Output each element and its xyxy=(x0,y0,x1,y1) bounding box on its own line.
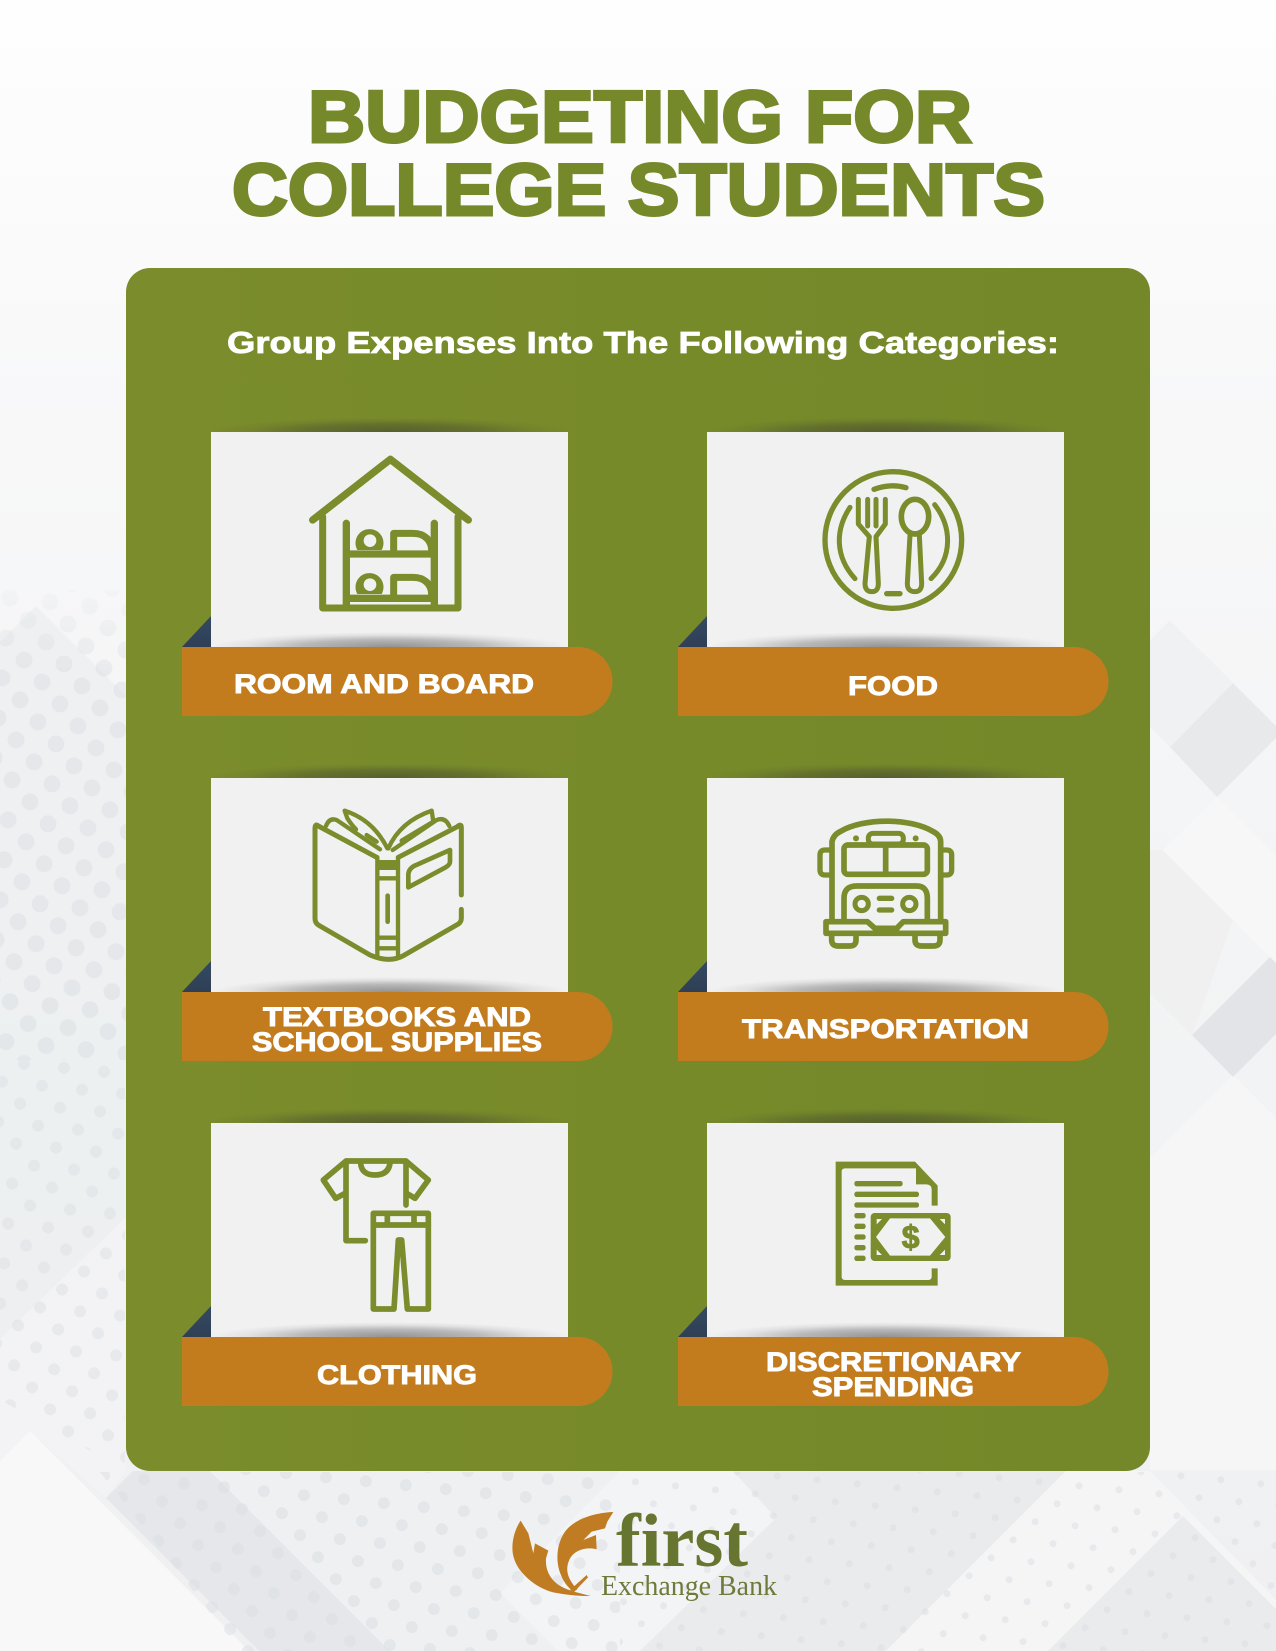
icon: open book xyxy=(315,811,461,959)
card: textbooks xyxy=(182,763,612,1061)
logo: First Exchange Bank: first xyxy=(616,1500,748,1583)
icon: house with bunk bed xyxy=(313,459,468,608)
card: room and board xyxy=(182,417,612,716)
card: food xyxy=(678,417,1108,716)
title: COLLEGE STUDENTS xyxy=(232,150,1045,231)
card: discretionary spending: SPENDING xyxy=(812,1372,974,1402)
icon: document with money xyxy=(836,1162,951,1286)
icon: plate with fork and spoon xyxy=(825,472,962,608)
icon: shirt and pants xyxy=(323,1161,428,1309)
icon: feather xyxy=(512,1512,613,1596)
label: ROOM AND BOARD xyxy=(234,669,534,699)
logo: First Exchange Bank: Exchange Bank xyxy=(601,1570,777,1602)
panel: expense categories xyxy=(126,268,1150,1471)
icon: document with money: $ xyxy=(902,1219,920,1255)
label: FOOD xyxy=(848,671,938,701)
logo: First Exchange Bank xyxy=(512,1500,777,1602)
label: TEXTBOOKS AND xyxy=(263,1002,531,1032)
title: BUDGETING FOR xyxy=(308,77,972,158)
card: clothing xyxy=(182,1108,612,1406)
card: textbooks: SCHOOL SUPPLIES xyxy=(252,1027,542,1057)
label: DISCRETIONARY xyxy=(766,1347,1021,1377)
panel heading: Group Expenses Into The Following Categories: xyxy=(227,325,1059,360)
label: TRANSPORTATION xyxy=(742,1014,1029,1044)
card: discretionary spending xyxy=(678,1108,1108,1406)
title xyxy=(232,77,1045,231)
icon: school bus xyxy=(820,821,952,946)
label: CLOTHING xyxy=(317,1360,477,1390)
card: transportation xyxy=(678,763,1108,1061)
